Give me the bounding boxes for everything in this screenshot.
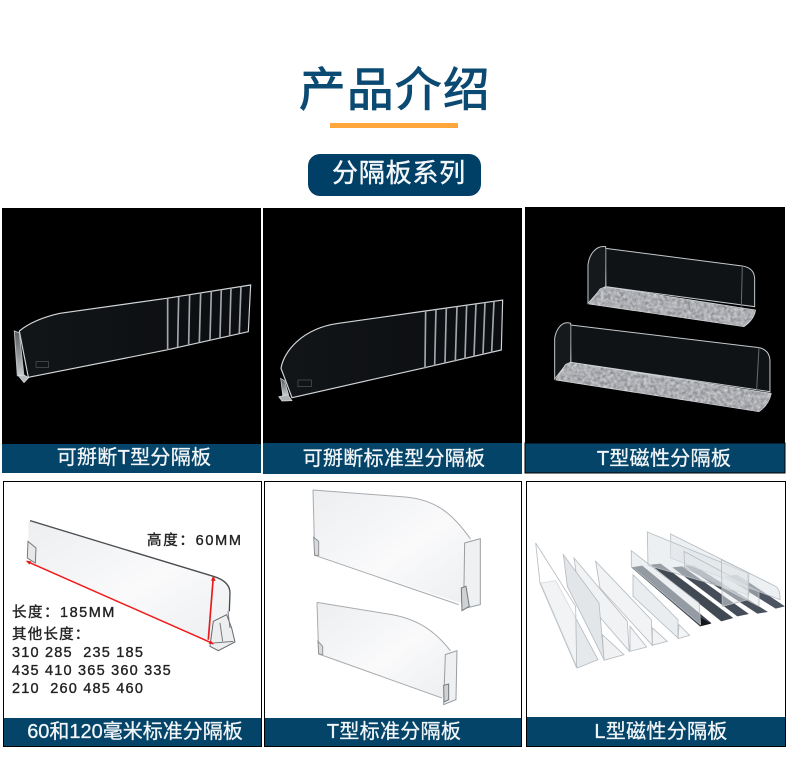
clear dividers: [536, 543, 690, 668]
caption: T型磁性分隔板: [597, 447, 731, 470]
caption: [265, 718, 521, 746]
dark magnetic dividers: [631, 532, 785, 626]
caption: [525, 443, 785, 473]
panel: T-type standard divider: [264, 482, 522, 746]
title: 产品介绍: [299, 64, 491, 116]
upper divider: [588, 246, 756, 327]
title underline: [330, 123, 458, 128]
upper divider: [313, 490, 480, 611]
product image: two T-type standard dividers: [313, 490, 480, 705]
caption: [527, 717, 785, 746]
length label: 长度：185MM: [12, 604, 116, 621]
panel: breakable T-type divider: [2, 208, 261, 473]
product image: row of L-shaped dividers: [536, 532, 785, 668]
lower divider: [555, 323, 771, 412]
caption: [2, 444, 261, 473]
height label: 高度：60MM: [147, 532, 243, 549]
other lengths list: 其他长度：: [12, 626, 90, 643]
product image: two magnetic dividers: [555, 246, 771, 412]
product image: breakable T divider: [14, 285, 251, 383]
lower divider: [317, 602, 457, 705]
product image: standard divider with red dimension arrows: [26, 520, 235, 651]
caption: T型标准分隔板: [327, 720, 461, 743]
panel: breakable standard divider: [263, 208, 522, 474]
panel: T-type magnetic divider: [525, 207, 785, 473]
caption: L型磁性分隔板: [594, 720, 728, 743]
caption: [4, 718, 261, 746]
caption: 可掰断T型分隔板: [57, 446, 211, 469]
caption: 可掰断标准型分隔板: [303, 447, 485, 470]
section badge: 分隔板系列: [332, 158, 466, 188]
panel: L-type magnetic divider: [526, 482, 786, 746]
caption: [263, 443, 522, 474]
caption: 60和120毫米标准分隔板: [27, 720, 243, 743]
product image: breakable standard divider: [279, 300, 503, 401]
panel: 60 and 120 mm standard divider: [4, 482, 262, 746]
other lengths list: 210 260 485 460: [12, 681, 144, 697]
other lengths list: 435 410 365 360 335: [12, 663, 172, 679]
other lengths list: [12, 626, 172, 697]
section badge: [308, 154, 481, 196]
other lengths list: 310 285 235 185: [12, 645, 144, 661]
